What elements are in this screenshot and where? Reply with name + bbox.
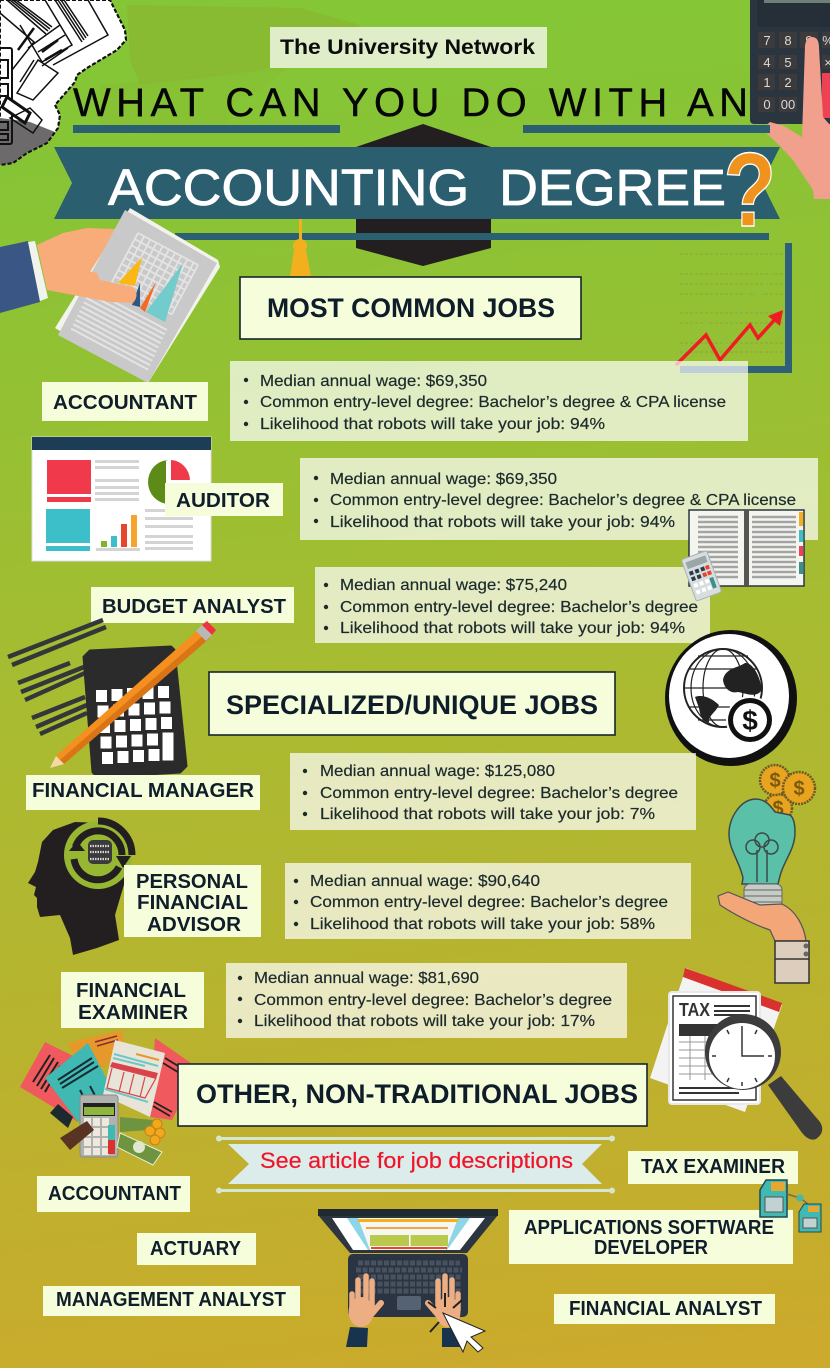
panel: budget analyst details bbox=[315, 567, 710, 643]
panel: auditor details: Common entry-level degree: Bachelor’s degree & CPA license bbox=[330, 492, 796, 509]
bullets bbox=[324, 583, 328, 630]
title line 2: ACCOUNTING DEGREE bbox=[108, 159, 726, 216]
icon: graduation cap bbox=[356, 124, 491, 266]
title line 1: WHAT CAN YOU DO WITH AN bbox=[73, 81, 748, 125]
label: actuary bbox=[137, 1233, 256, 1265]
icon: desktop calculator with hand: 8 bbox=[784, 33, 792, 48]
icon: calculator, pencil and hatch lines bbox=[8, 620, 216, 777]
label: auditor bbox=[165, 483, 283, 516]
label: financial manager: FINANCIAL MANAGER bbox=[32, 780, 255, 802]
chart: rising line bbox=[676, 243, 792, 373]
label: personal financial advisor bbox=[124, 865, 261, 937]
icon: desktop calculator with hand: 1 bbox=[763, 75, 771, 90]
label: accountant (other): ACCOUNTANT bbox=[48, 1183, 181, 1205]
label: management analyst: MANAGEMENT ANALYST bbox=[56, 1289, 286, 1311]
label: applications software developer: DEVELOPER bbox=[594, 1237, 709, 1259]
panel: financial manager details bbox=[290, 753, 696, 830]
icon: desktop calculator with hand bbox=[750, 0, 830, 199]
icon: desktop calculator with hand: 00 bbox=[781, 97, 795, 112]
bullets bbox=[244, 378, 248, 426]
icon: desktop calculator with hand: 4 bbox=[763, 55, 771, 70]
heading: most common jobs: MOST COMMON JOBS bbox=[267, 293, 555, 323]
panel: financial examiner details: Median annual wage: $81,690 bbox=[254, 970, 479, 987]
label: accountant bbox=[42, 382, 208, 421]
label: The University Network: The University Network bbox=[280, 36, 535, 59]
icon: open book bbox=[689, 510, 804, 586]
label: accountant: ACCOUNTANT bbox=[53, 392, 197, 414]
banner: see article: See article for job descriptions bbox=[260, 1148, 573, 1173]
label: tax examiner: TAX EXAMINER bbox=[641, 1156, 786, 1178]
heading: most common jobs bbox=[240, 277, 581, 339]
icon: light bulb with coins and hand bbox=[718, 765, 815, 983]
icon: receipts, calculator and cash pile bbox=[20, 1030, 198, 1165]
icon: desktop calculator with hand: 2 bbox=[784, 75, 792, 90]
icon: desktop calculator with hand: 9 bbox=[805, 33, 813, 48]
icon: desktop calculator with hand: 0 bbox=[763, 97, 771, 112]
label: financial examiner: FINANCIAL bbox=[76, 980, 186, 1002]
banner: see article bbox=[216, 1136, 615, 1194]
label: personal financial advisor: FINANCIAL bbox=[137, 892, 248, 914]
icon: globe with dollar bbox=[665, 630, 797, 766]
bullets bbox=[314, 476, 318, 523]
icon: small calculator bbox=[681, 551, 722, 601]
panel: auditor details bbox=[300, 458, 818, 540]
bullets bbox=[303, 769, 307, 816]
panel: accountant details bbox=[230, 361, 748, 441]
panel: accountant details: Likelihood that robots will take your job: 94% bbox=[260, 416, 605, 433]
panel: budget analyst details: Median annual wage: $75,240 bbox=[340, 577, 567, 594]
label: personal financial advisor: ADVISOR bbox=[147, 914, 242, 936]
panel: financial examiner details: Likelihood that robots will take your job: 17% bbox=[254, 1013, 595, 1030]
label: financial examiner bbox=[61, 972, 204, 1028]
label: budget analyst bbox=[91, 587, 294, 623]
label: applications software developer: APPLICATIONS SOFTWARE bbox=[524, 1217, 774, 1239]
label: The University Network bbox=[270, 27, 547, 68]
label: financial analyst: FINANCIAL ANALYST bbox=[569, 1298, 762, 1320]
panel: personal financial advisor details: Common entry-level degree: Bachelor’s degree bbox=[310, 894, 668, 911]
icon: globe with dollar: $ bbox=[742, 705, 758, 736]
label: budget analyst: BUDGET ANALYST bbox=[102, 596, 286, 618]
label: management analyst bbox=[43, 1286, 300, 1316]
icon: light bulb with coins and hand: $ bbox=[793, 778, 805, 800]
panel: budget analyst details: Likelihood that robots will take your job: 94% bbox=[340, 620, 685, 637]
faint background tree bbox=[100, 5, 360, 125]
icon: tax document with magnifier bbox=[650, 968, 822, 1140]
heading: specialized/unique jobs: SPECIALIZED/UNIQUE JOBS bbox=[226, 690, 598, 720]
icon: desktop calculator with hand: 7 bbox=[763, 33, 771, 48]
title ribbon bbox=[54, 147, 780, 219]
heading: specialized/unique jobs bbox=[209, 672, 615, 735]
heading: other, non-traditional jobs bbox=[178, 1064, 647, 1126]
panel: auditor details: Likelihood that robots will take your job: 94% bbox=[330, 514, 675, 531]
icon: tax document with magnifier: TAX bbox=[679, 1000, 710, 1020]
panel: personal financial advisor details: Likelihood that robots will take your job: 58% bbox=[310, 916, 655, 933]
panel: personal financial advisor details bbox=[285, 863, 691, 939]
icon: tassel bbox=[290, 219, 311, 276]
bullets bbox=[238, 976, 242, 1023]
label: applications software developer bbox=[509, 1210, 793, 1264]
panel: auditor details: Median annual wage: $69,350 bbox=[330, 471, 557, 488]
title rules bbox=[73, 125, 770, 240]
panel: budget analyst details: Common entry-level degree: Bachelor’s degree bbox=[340, 599, 698, 616]
label: accountant (other) bbox=[37, 1176, 190, 1212]
panel: financial manager details: Common entry-level degree: Bachelor’s degree bbox=[320, 785, 678, 802]
icon: light bulb with coins and hand: $ bbox=[769, 770, 781, 792]
panel: accountant details: Common entry-level degree: Bachelor’s degree & CPA license bbox=[260, 394, 726, 411]
icon: question mark: ? bbox=[724, 132, 776, 249]
panel: financial examiner details: Common entry-level degree: Bachelor’s degree bbox=[254, 992, 612, 1009]
label: personal financial advisor: PERSONAL bbox=[136, 871, 248, 893]
label: financial analyst bbox=[554, 1294, 775, 1324]
label: financial manager bbox=[26, 775, 260, 810]
label: tax examiner bbox=[628, 1151, 798, 1184]
icon: SD cards bbox=[760, 1180, 821, 1232]
panel: financial examiner details bbox=[226, 963, 627, 1038]
label: financial examiner: EXAMINER bbox=[78, 1002, 189, 1024]
label: auditor: AUDITOR bbox=[176, 490, 271, 512]
icon: light bulb with coins and hand: $ bbox=[772, 798, 784, 820]
icon: hand holding report bbox=[0, 208, 220, 383]
icon: sketched paperwork corner bbox=[0, 0, 126, 165]
panel: financial manager details: Likelihood that robots will take your job: 7% bbox=[320, 806, 655, 823]
icon: desktop calculator with hand: 5 bbox=[784, 55, 792, 70]
heading: other, non-traditional jobs: OTHER, NON-TRADITIONAL JOBS bbox=[196, 1079, 638, 1109]
icon: head with coin cycle bbox=[28, 821, 132, 955]
panel: personal financial advisor details: Median annual wage: $90,640 bbox=[310, 873, 540, 890]
bullets bbox=[294, 879, 298, 926]
icon: laptop with hands and cursor bbox=[318, 1209, 498, 1352]
icon: report sheet bbox=[32, 437, 211, 561]
panel: accountant details: Median annual wage: $69,350 bbox=[260, 373, 487, 390]
panel: financial manager details: Median annual wage: $125,080 bbox=[320, 763, 555, 780]
label: actuary: ACTUARY bbox=[150, 1238, 242, 1260]
